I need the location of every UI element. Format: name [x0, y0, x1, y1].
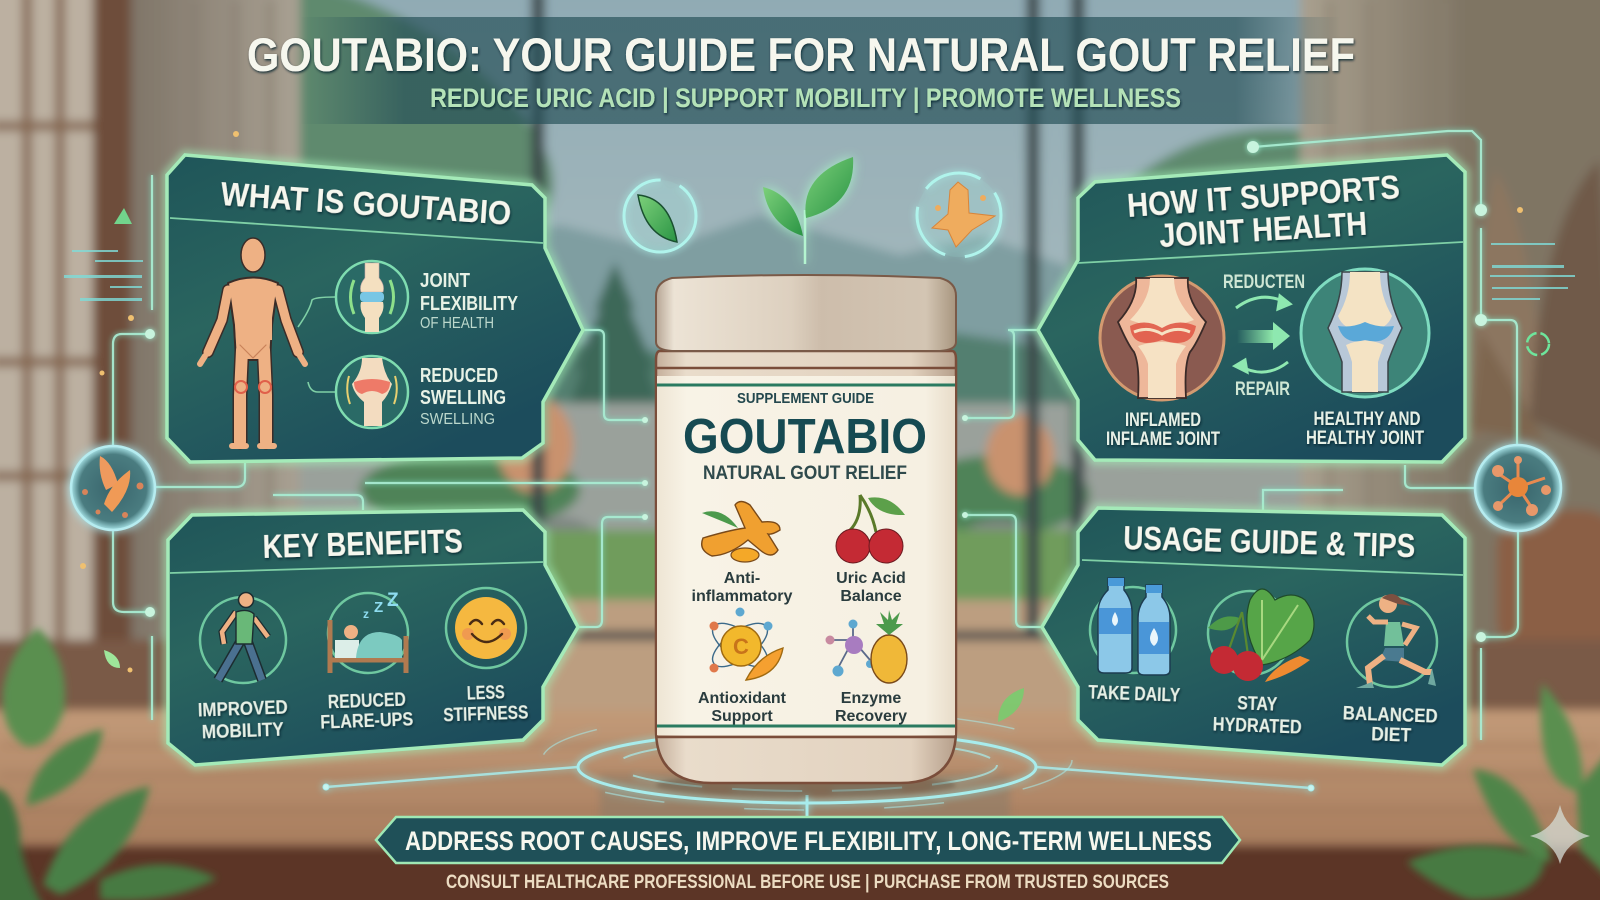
label: healthy joint: HEALTHY AND	[1314, 409, 1420, 430]
label: healthy joint: HEALTHY JOINT	[1306, 428, 1424, 449]
icon: small crystal left	[114, 208, 132, 224]
subtitle: REDUCE URIC ACID | SUPPORT MOBILITY | PROMOTE WELLNESS	[430, 83, 1181, 113]
label: enzyme recovery: Recovery	[835, 708, 907, 725]
label: improved mobility: MOBILITY	[201, 720, 284, 743]
icon: human body	[200, 238, 305, 446]
icon: smiley	[446, 588, 526, 668]
label: joint flexibility	[420, 270, 519, 332]
label: take daily: TAKE DAILY	[1088, 682, 1181, 707]
label: reduced swelling: SWELLING	[420, 411, 495, 428]
label: joint flexibility: OF HEALTH	[420, 315, 494, 332]
label: balanced diet: BALANCED	[1342, 703, 1438, 728]
heading	[1126, 168, 1401, 254]
label: balanced diet	[1342, 703, 1438, 747]
label: antioxidant support	[698, 690, 787, 725]
icon: bed with sleeper: z	[363, 607, 369, 621]
icon: bed with sleeper: Z	[374, 599, 383, 616]
label: balanced diet: DIET	[1371, 724, 1412, 747]
icon: walking person	[200, 592, 286, 683]
label: reduced swelling: REDUCED	[420, 365, 498, 387]
label: stay hydrated: HYDRATED	[1212, 714, 1302, 739]
label: reduced swelling	[420, 365, 506, 428]
label: less stiffness: LESS	[466, 682, 505, 705]
icon: vitamin c atom: C	[733, 634, 749, 659]
panel: key benefits	[168, 510, 578, 765]
label: improved mobility: IMPROVED	[197, 697, 288, 722]
icon: sparkle watermark	[1530, 805, 1590, 864]
label: reduced flare-ups	[320, 690, 414, 734]
label: anti-inflammatory: inflammatory	[692, 588, 793, 605]
icon: healthy joint	[1301, 269, 1429, 397]
icon: swollen joint	[308, 356, 408, 428]
supplement guide text: SUPPLEMENT GUIDE	[737, 390, 874, 407]
foreground plant left	[0, 628, 217, 900]
label: uric acid balance	[836, 570, 906, 605]
icon: small leaf centre right	[998, 688, 1024, 722]
jar	[656, 275, 956, 797]
heading: KEY BENEFITS	[262, 522, 463, 565]
foreground plant right	[1407, 683, 1600, 900]
holographic rings under jar	[323, 710, 1314, 817]
icon: bed with sleeper: Z	[387, 590, 399, 611]
panel: what is goutabio	[167, 155, 583, 462]
jar label	[657, 376, 955, 735]
heading: WHAT IS GOUTABIO	[220, 175, 512, 232]
label: anti-inflammatory: Anti-	[724, 570, 760, 587]
icon: sprout	[763, 157, 853, 264]
label: improved mobility	[197, 697, 288, 743]
label: inflamed joint: INFLAMED	[1125, 410, 1201, 431]
label: less stiffness: STIFFNESS	[443, 703, 529, 726]
panel: how it supports joint health	[1038, 155, 1465, 462]
label: reduced flare-ups: REDUCED	[327, 690, 406, 713]
label: joint flexibility: JOINT	[420, 270, 470, 292]
icon: inflamed joint	[1100, 276, 1224, 400]
icon: bed with sleeper	[328, 590, 408, 673]
label: joint flexibility: FLEXIBILITY	[420, 293, 519, 315]
arrows: reduction and repair	[1235, 296, 1290, 372]
panel: usage guide and tips	[1042, 508, 1465, 765]
circuit connector lines	[80, 131, 1523, 740]
disclaimer: CONSULT HEALTHCARE PROFESSIONAL BEFORE USE | PURCHASE FROM TRUSTED SOURCES	[446, 872, 1169, 893]
label: enzyme recovery	[835, 690, 907, 725]
label: uric acid balance: Balance	[840, 588, 902, 605]
icon: runner	[1347, 594, 1437, 688]
orb: right molecule	[1475, 445, 1561, 531]
jar lid	[656, 275, 956, 351]
label: antioxidant support: Support	[711, 708, 773, 725]
label: stay hydrated	[1212, 693, 1302, 739]
label: less stiffness	[443, 682, 529, 726]
banner text: ADDRESS ROOT CAUSES, IMPROVE FLEXIBILITY, LONG-TERM WELLNESS	[405, 826, 1212, 856]
icon: flexible joint	[298, 261, 408, 333]
data readouts right	[1490, 243, 1575, 300]
label: inflamed joint: INFLAME JOINT	[1106, 429, 1220, 450]
label: enzyme recovery: Enzyme	[841, 690, 901, 707]
heading: JOINT HEALTH	[1158, 205, 1368, 254]
label: antioxidant support: Antioxidant	[698, 690, 787, 707]
icon: enzyme and pineapple	[826, 610, 907, 683]
label: anti-inflammatory	[692, 570, 793, 605]
label: reduced flare-ups: FLARE-UPS	[320, 709, 414, 734]
icon: vitamin c atom	[706, 608, 783, 680]
label: uric acid balance: Uric Acid	[836, 570, 906, 587]
heading: HOW IT SUPPORTS	[1126, 168, 1401, 224]
label: inflamed joint	[1106, 410, 1220, 450]
icon: cherries	[836, 495, 905, 563]
icon: small green ring	[1527, 333, 1549, 355]
icon: small leaf left	[104, 650, 120, 668]
orb: left crystals	[71, 446, 155, 530]
icon: leaf in ring	[624, 180, 696, 252]
tagline: NATURAL GOUT RELIEF	[703, 463, 907, 484]
brand name: GOUTABIO	[683, 410, 927, 464]
title: GOUTABIO: YOUR GUIDE FOR NATURAL GOUT RELIEF	[247, 28, 1355, 81]
data readouts left	[64, 250, 143, 301]
label: stay hydrated: STAY	[1237, 693, 1278, 716]
bottom banner	[376, 817, 1240, 863]
label: reduced swelling: SWELLING	[420, 387, 506, 409]
icon: crystal in ring	[917, 173, 1001, 257]
text: reducten: REDUCTEN	[1223, 272, 1305, 293]
title band	[300, 17, 1340, 124]
heading: USAGE GUIDE & TIPS	[1123, 519, 1416, 564]
icon: water bottles	[1090, 578, 1176, 675]
label: healthy joint	[1306, 409, 1424, 449]
text: repair: REPAIR	[1235, 379, 1290, 400]
icon: vegetables and cherries	[1208, 589, 1314, 682]
icon: turmeric	[702, 502, 780, 562]
